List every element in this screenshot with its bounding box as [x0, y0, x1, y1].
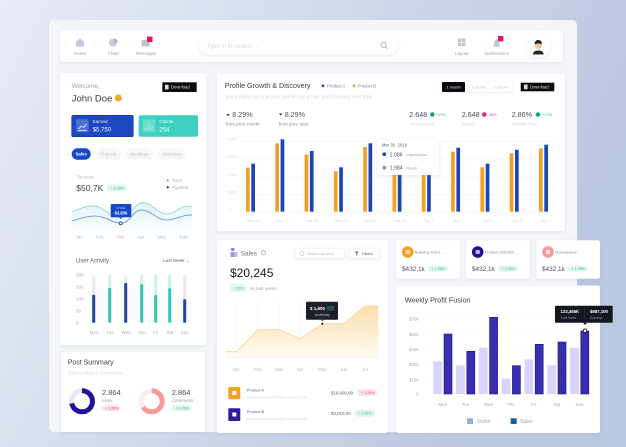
line chart: revenue: [72, 203, 192, 232]
sales change: vs last years: [250, 286, 277, 292]
navigation bar: [60, 30, 563, 62]
user name: John Doe: [72, 93, 112, 104]
card: building maintenance: $432,1k: [402, 266, 426, 273]
bar chart: product A vs product B: [227, 136, 556, 223]
row: product B: Lorem Ipsum is simply dummy text: [247, 416, 308, 421]
bar chart: visitor vs sales: Wed: [484, 402, 493, 407]
legend: revenue: [167, 178, 189, 190]
bar chart: product A vs product B: 1,750: [227, 172, 237, 177]
tooltip: weekly sales: $987,100: [590, 309, 609, 314]
tooltip: weekly sales: Total Sales: [560, 316, 576, 320]
stat: growth rate: 2.86%: [512, 110, 533, 119]
bar chart: visitor vs sales: Tue: [462, 402, 470, 407]
download button: [521, 83, 554, 91]
row: product A: [228, 387, 377, 400]
heading: post summary: Post Summary: [68, 360, 114, 366]
row: product B: + 1.26%: [358, 412, 372, 416]
legend: visitor and sales: Sales: [520, 419, 533, 425]
stat card: clients: Clients: [159, 119, 174, 124]
bar chart: product A vs product B: Apr 4: [512, 218, 523, 223]
download button: [162, 82, 197, 92]
row: product A: Lorem Ipsum is simply dummy text: [247, 394, 308, 400]
revenue summary: + 1.26%: [110, 186, 125, 190]
panel: sales: [217, 240, 388, 433]
axis labels: months: Mar: [117, 234, 125, 240]
icon: notifications: [484, 36, 510, 56]
tooltip: sales point: $ 1,600: [310, 306, 326, 311]
tooltip: Mar 30: Impressions: [406, 153, 427, 157]
bar chart: product A vs product B: Apr 5: [542, 218, 552, 223]
bar chart: user activity: Fri: [153, 330, 158, 335]
tooltip: revenue point: $3,800: [115, 210, 128, 215]
stat card: earned: $5,750: [93, 128, 112, 134]
stat: likes: Likes: [102, 398, 113, 403]
axis labels: months: Feb: [96, 234, 104, 240]
card: marketplace: Marketplace: [555, 250, 578, 254]
dropdown: last week: Last Week ⌄: [163, 258, 190, 263]
bar chart: user activity: 50: [76, 309, 82, 314]
bar chart: user activity: Sun: [181, 330, 189, 335]
bar chart: product A vs product B: Mar 27: [276, 218, 290, 223]
tabs: [72, 148, 185, 160]
stat: from previous year: [279, 110, 309, 126]
donut: comments: [141, 391, 162, 412]
area chart: sales: Jan: [232, 367, 240, 372]
range selector: 6 month: [472, 84, 486, 90]
heading: sales: [241, 250, 266, 257]
bar chart: visitor vs sales: Mon: [438, 402, 448, 407]
area chart: sales: May: [318, 367, 327, 372]
bar chart: visitor vs sales: Sat: [553, 402, 561, 407]
legend: revenue: Total: [172, 178, 182, 183]
stat: reach: Reach: [462, 121, 475, 126]
subheading: See insights on how your profile has grown and changed over time: [225, 94, 373, 100]
tabs: Projects: [100, 152, 117, 157]
bar chart: visitor vs sales: $75k: [409, 317, 419, 322]
stat: reach: [462, 110, 497, 126]
tooltip: sales point: [306, 302, 338, 325]
row: product A: $19,000,89: [331, 390, 354, 395]
card: building maintenance: Building maint ...: [415, 250, 444, 254]
bar chart: visitor vs sales: $60k: [409, 332, 419, 337]
card: product distribution: + 1.26%: [502, 267, 516, 271]
tooltip: Mar 30: [377, 139, 439, 175]
bar chart: product A vs product B: Mar 28: [306, 218, 319, 223]
bar chart: visitor vs sales: Sun: [575, 402, 584, 407]
stat: comments: [172, 388, 194, 411]
bar chart: visitor vs sales: [409, 317, 590, 407]
bar chart: product A vs product B: Apr 2: [454, 218, 464, 223]
legend: visitor and sales: [467, 418, 533, 425]
search product: [295, 248, 344, 259]
bar chart: visitor vs sales: Fri: [531, 402, 536, 407]
heading: user activity: User Activity: [76, 258, 109, 264]
search bar: [199, 37, 398, 55]
panel: profile growth and discovery: [217, 74, 565, 231]
sales change: ↑ 12%: [232, 286, 244, 290]
bar chart: visitor vs sales: $30k: [409, 362, 419, 367]
bar chart: user activity: Thu: [138, 330, 146, 335]
bar chart: product A vs product B: Mar 29: [335, 218, 348, 223]
revenue summary: Revenue: [77, 174, 95, 180]
welcome text: Welcome,: [72, 83, 100, 90]
stat: growth rate: +17%: [542, 113, 552, 117]
row: product B: [228, 408, 375, 421]
search bar: Type in to search ...: [207, 44, 259, 50]
bar chart: product A vs product B: 1,000: [227, 190, 237, 194]
axis labels: months: May: [157, 234, 167, 240]
area chart: sales: [226, 301, 378, 372]
range selector: Custom: [494, 84, 509, 90]
axis labels: months: Jan: [76, 234, 83, 240]
tabs: Meetings: [130, 152, 149, 157]
icon: messages: Messages: [136, 51, 157, 56]
stat: likes: + 1.26%: [105, 406, 119, 410]
tabs: Sales: [75, 152, 87, 157]
tooltip: Mar 30: Reach: [406, 166, 417, 170]
stat: comments: 2.864: [172, 388, 190, 397]
card: marketplace: [536, 240, 600, 279]
stat card: earned: [72, 115, 133, 137]
row: product B: Product B: [247, 409, 265, 414]
stat: impressions: +17%: [436, 113, 446, 117]
heading: sales: Sales: [241, 250, 258, 257]
sales total: $20,245: [230, 266, 274, 280]
area chart: sales: Mar: [275, 367, 284, 372]
revenue summary: $50,7K: [76, 183, 104, 193]
revenue summary: [76, 174, 127, 193]
search product: Search product: [307, 251, 335, 256]
bar chart: user activity: 100: [76, 297, 84, 302]
row: product A: + 1.26%: [361, 391, 375, 395]
icon: chart: [108, 38, 120, 56]
range selector: [442, 82, 512, 92]
legend: visitor and sales: Visitor: [477, 419, 491, 425]
card: product distribution: $432,1k: [472, 266, 496, 273]
bar chart: product A vs product B: Mar 26: [247, 218, 260, 223]
bar chart: user activity: 200: [76, 285, 84, 290]
icon: layout: [455, 38, 469, 56]
stat: comments: + 1.26%: [176, 406, 190, 410]
legend: products: [322, 84, 376, 88]
icon: notifications: Notifications: [484, 51, 510, 56]
tooltip: Mar 30: 1,984: [390, 166, 403, 172]
card: product distribution: [466, 240, 530, 279]
row: product A: Product A: [247, 388, 264, 392]
tooltip: sales point: profit/day: [315, 313, 330, 317]
bar chart: visitor vs sales: Thu: [507, 402, 515, 407]
area chart: sales: Apr: [296, 367, 304, 372]
bar chart: user activity: Tue: [106, 330, 114, 335]
stat: from previous year: from prev. year: [279, 121, 309, 126]
stat: growth rate: Growth Rate: [512, 121, 537, 126]
bar chart: product A vs product B: 0: [229, 207, 232, 212]
bar chart: product A vs product B: 2,000: [227, 154, 237, 159]
card: product distribution: Product Distribut ...: [485, 250, 519, 254]
area chart: sales: Feb: [254, 367, 262, 372]
stat card: clients: 254: [159, 128, 170, 134]
download button: Download: [171, 85, 190, 90]
avatar: [526, 34, 550, 58]
icon: home: Home: [74, 51, 86, 56]
bar chart: product A vs product B: Mar 30: [364, 218, 377, 223]
bar chart: product A vs product B: 3,200: [227, 136, 237, 142]
bar chart: visitor vs sales: 0: [416, 392, 419, 396]
axis labels: months: June: [179, 234, 189, 240]
tooltip: Mar 30: Mar 30, 2019: [382, 142, 408, 148]
tooltip: revenue point: [111, 204, 131, 219]
card: marketplace: + 1.26%: [572, 267, 586, 271]
tooltip: Mar 30: 2.086: [390, 152, 403, 158]
stat: comments: Comments: [172, 398, 194, 403]
icon: chart: Chart: [108, 51, 120, 56]
axis labels: months: Apr: [137, 234, 145, 240]
tabs: Standups: [162, 152, 182, 157]
area chart: sales: Jul: [362, 367, 368, 372]
stat: reach: 2.648: [462, 110, 480, 119]
legend: revenue: Pipeline: [172, 185, 189, 190]
row: product B: $3,010,50: [331, 411, 351, 416]
legend: products: Product A: [327, 84, 345, 88]
stat: from previous year: 8.29%: [285, 110, 306, 119]
stat: impressions: 2.648: [409, 110, 427, 119]
card: building maintenance: + 1.26%: [432, 267, 446, 271]
card: building maintenance: [396, 240, 460, 279]
card: marketplace: $432,1k: [542, 266, 566, 273]
legend: products: Product B: [358, 84, 376, 88]
bar chart: visitor vs sales: $15k: [409, 377, 419, 382]
axis labels: months: [76, 234, 189, 240]
sales change: [229, 284, 277, 292]
stat: from previous month: 8.29%: [232, 110, 253, 119]
tooltip: weekly sales: 123,455K: [560, 309, 580, 314]
icon: messages: [136, 37, 157, 56]
icon: sales: [230, 248, 238, 257]
bar chart: visitor vs sales: $45k: [409, 347, 419, 352]
icon: layout: Layout: [455, 51, 469, 56]
donut: likes: [72, 391, 92, 412]
stat: likes: [102, 388, 121, 411]
stat: impressions: [409, 110, 446, 126]
bar chart: user activity: Sat: [166, 330, 174, 335]
area chart: sales: Jun: [340, 367, 348, 372]
panel: post summary: [61, 352, 205, 432]
stat: reach: -26%: [488, 113, 497, 117]
bar chart: product A vs product B: Apr 1: [424, 218, 435, 223]
panel: weekly profit fusion: [396, 286, 600, 433]
stat: from previous month: [226, 110, 260, 126]
stat: from previous month: from prev. month: [226, 121, 260, 126]
bar chart: user activity: 0: [76, 320, 79, 325]
bar chart: user activity: 300: [76, 273, 84, 278]
main dashboard panel: [49, 20, 577, 432]
subheading: Total of likes & comments: [68, 370, 123, 376]
download button: Download: [530, 85, 549, 90]
filters button: Filters: [362, 251, 373, 256]
stat card: clients: [139, 115, 198, 137]
icon: home: [74, 38, 86, 56]
tooltip: revenue point: 17 Mar: [116, 206, 126, 210]
bar chart: user activity: [76, 273, 189, 335]
bar chart: user activity: Wed: [121, 330, 131, 335]
bar chart: product A vs product B: Apr 3: [483, 218, 493, 223]
stat: growth rate: [512, 110, 552, 126]
heading: Weekly Profit Fusion: [405, 296, 470, 304]
stat card: earned: Earned: [93, 119, 108, 124]
bar chart: user activity: Mon: [90, 330, 99, 335]
stat: impressions: Impressions: [410, 121, 435, 126]
bar chart: product A vs product B: Mar 31: [394, 218, 407, 223]
heading: Profile Growth & Discovery: [225, 81, 311, 90]
panel: welcome and activity: [60, 73, 206, 345]
tooltip: weekly sales: Earnings: [590, 316, 603, 320]
filters button: [350, 248, 379, 259]
tooltip: weekly sales: [555, 306, 613, 333]
stat: likes: 2.864: [102, 388, 121, 397]
range selector: 1 month: [446, 84, 461, 90]
